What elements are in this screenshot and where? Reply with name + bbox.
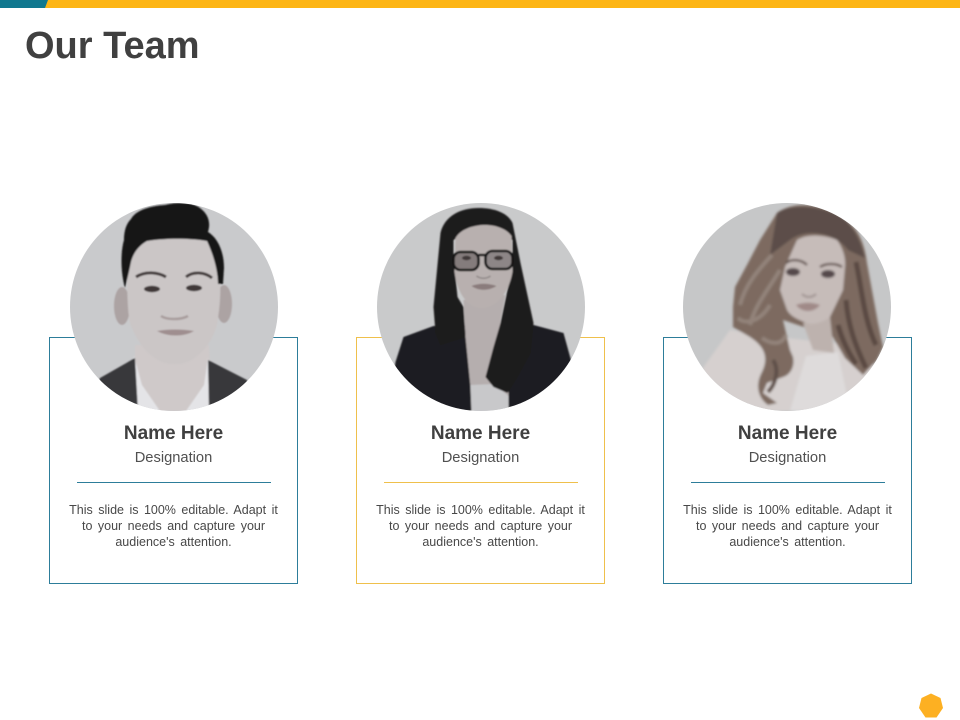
top bar <box>0 0 960 8</box>
designation 3: Designation <box>749 450 826 466</box>
title: Our Team <box>25 25 200 67</box>
portrait: man in dark jacket <box>70 203 278 411</box>
description 1 <box>69 503 278 549</box>
panel: team member 3 <box>663 337 912 584</box>
name 1: Name Here <box>124 423 223 444</box>
description 3: This slide is 100% editable. Adapt it <box>683 503 892 517</box>
designation 2: Designation <box>442 450 519 466</box>
portrait: woman with glasses <box>377 203 585 411</box>
panel: team member 2 <box>356 337 605 584</box>
panel: team member 1 <box>49 337 298 584</box>
designation 1: Designation <box>135 450 212 466</box>
description 3: to your needs and capture your <box>696 519 879 533</box>
description 2 <box>376 503 585 549</box>
description 3: audience's attention. <box>729 535 846 549</box>
description 3 <box>683 503 892 549</box>
portrait: woman with wavy hair <box>683 203 891 411</box>
icon: orange heptagon <box>919 694 943 718</box>
description 2: to your needs and capture your <box>389 519 572 533</box>
description 1: This slide is 100% editable. Adapt it <box>69 503 278 517</box>
description 2: audience's attention. <box>422 535 539 549</box>
name 2: Name Here <box>431 423 530 444</box>
description 1: to your needs and capture your <box>82 519 265 533</box>
description 2: This slide is 100% editable. Adapt it <box>376 503 585 517</box>
name 3: Name Here <box>738 423 837 444</box>
description 1: audience's attention. <box>115 535 232 549</box>
